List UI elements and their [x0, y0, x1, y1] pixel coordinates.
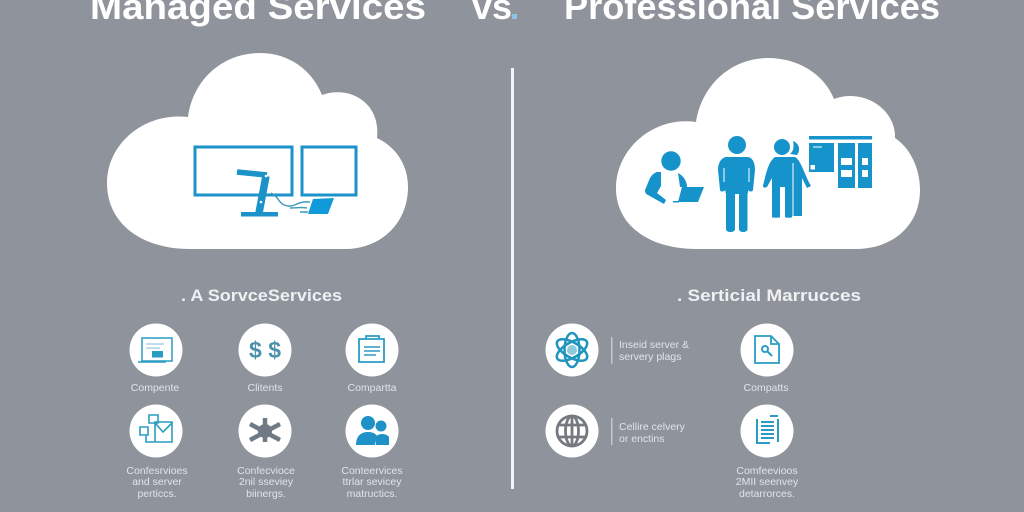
tick: globe text: [611, 418, 612, 445]
icon: mail and boxes: [130, 404, 182, 458]
label: left services text 2: Confecvioce: [237, 465, 295, 477]
label: Compente: Compente: [131, 382, 179, 394]
icon: standing person: [718, 136, 755, 232]
tick: atom text: [611, 337, 612, 364]
label: left services text 1: and server: [132, 476, 182, 488]
label: right text 3: 2MII seenvey: [736, 476, 799, 488]
label: left services text 2: biinergs.: [246, 488, 286, 500]
icon: currency: $$: [249, 337, 281, 363]
label: left services text 1: perticcs.: [137, 488, 177, 500]
label: left services text 3: ttrlar sevicey: [343, 476, 402, 488]
label: left services text 2: 2nil sseviey: [239, 476, 294, 488]
label: right text 3: detarrorces.: [739, 488, 795, 500]
panel: managed services cloud: [107, 53, 408, 249]
icon: currency: [238, 324, 292, 376]
icon: two people: [763, 139, 811, 218]
label: right text 2: Cellire celvery: [619, 421, 686, 433]
label: right text 1: servery plags: [619, 351, 681, 363]
label: left services text 3: matructics.: [347, 488, 397, 500]
label: right text 1: Inseid server &: [619, 339, 689, 351]
label: right text 3: Comfeevioos: [736, 465, 798, 477]
icon: list: [740, 404, 794, 458]
panel: professional services cloud: [616, 58, 920, 249]
label: Compatts: Compatts: [744, 382, 788, 394]
icon: person at laptop: [645, 151, 704, 204]
icon: board: [809, 136, 872, 188]
center divider: [511, 68, 514, 489]
icon: hub: [238, 404, 292, 458]
label: Clitents: Clitents: [247, 382, 283, 394]
icon: people: [346, 404, 398, 458]
heading: right services: . Serticial Marrucces: [677, 286, 861, 305]
icon: monitors and robot arm: [195, 147, 356, 216]
heading: left services: . A SorvceServices: [181, 286, 342, 305]
label: left services text 3: Conteervices: [341, 465, 403, 477]
icon: globe: [546, 404, 598, 458]
label: Compartta: Compartta: [347, 382, 397, 394]
icon: atom: [546, 324, 598, 376]
icon: clipboard: [346, 324, 398, 376]
icon: document window: [130, 324, 182, 376]
label: left services text 1: Confesrvioes: [126, 465, 188, 477]
icon: document search: [740, 324, 794, 376]
label: right text 2: or enctins: [619, 433, 665, 445]
title: [90, 0, 940, 27]
